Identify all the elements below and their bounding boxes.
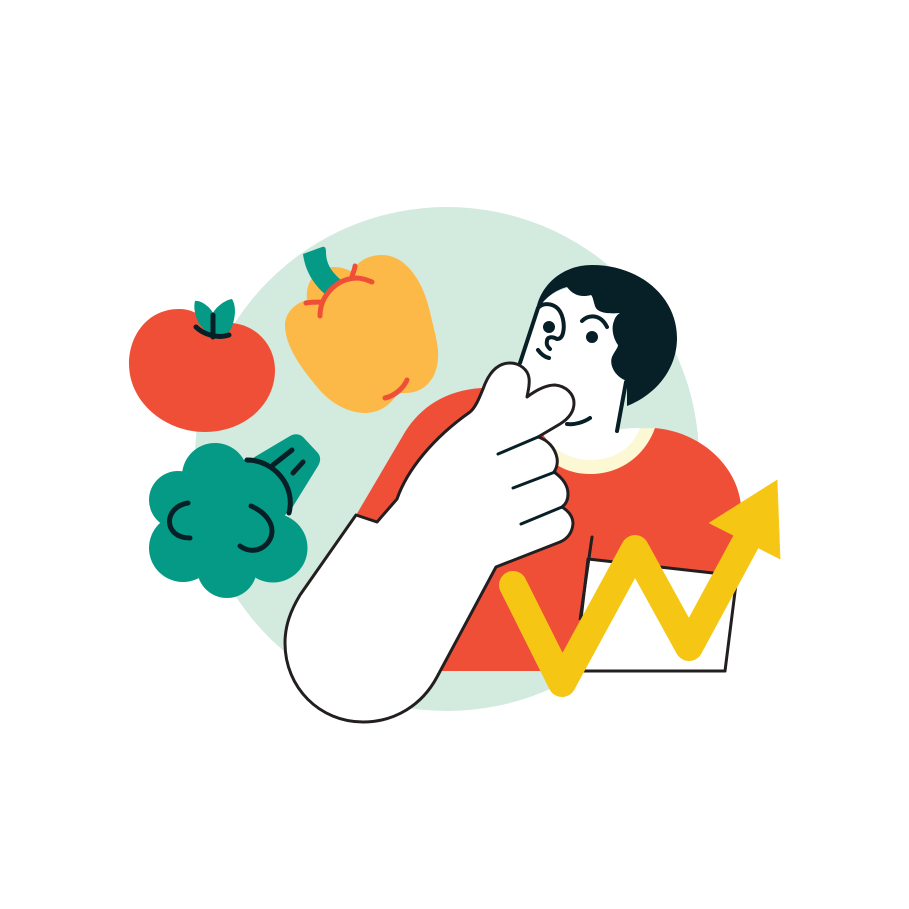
icon: broccoli bbox=[149, 434, 320, 598]
arrow: rising zigzag bbox=[513, 480, 780, 683]
icon: tomato bbox=[129, 299, 275, 432]
face lines bbox=[520, 304, 626, 431]
inner arm line bbox=[578, 537, 592, 634]
background circle bbox=[195, 207, 699, 711]
red below-paper patch bbox=[442, 600, 580, 671]
icon: bell pepper bbox=[285, 247, 438, 413]
eye: right bbox=[586, 331, 598, 343]
paper bbox=[575, 559, 737, 671]
finger lines bbox=[498, 437, 562, 524]
face and neck bbox=[520, 285, 640, 460]
hair bbox=[536, 265, 677, 406]
panel: person bbox=[285, 265, 741, 722]
collar bbox=[545, 428, 655, 474]
eye: left bbox=[543, 321, 555, 333]
arm and hand bbox=[285, 363, 574, 722]
shirt bbox=[355, 388, 741, 671]
